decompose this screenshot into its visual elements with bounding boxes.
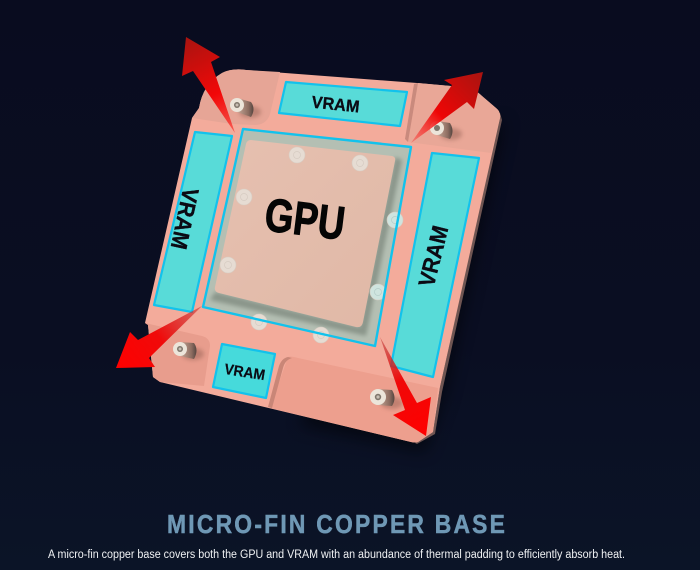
label: VRAM: [166, 186, 204, 252]
screws on frame: [220, 147, 403, 343]
description: A micro-fin copper base covers both the GPU and VRAM with an abundance of thermal padding to efficiently absorb heat.: [48, 549, 625, 561]
standoff: top left: [230, 98, 261, 118]
arrow: bottom right: [380, 337, 431, 436]
plate body: [145, 69, 500, 442]
right VRAM pad: [391, 153, 479, 377]
recess: bottom left corner: [145, 323, 210, 386]
top VRAM pad: [279, 82, 407, 126]
standoff: top right: [430, 121, 462, 140]
recess: top right corner: [408, 83, 500, 153]
label: VRAM: [413, 223, 453, 289]
frame outline: [203, 129, 411, 346]
GPU thermal frame: [203, 129, 411, 346]
plate side edge: [415, 113, 502, 444]
label: GPU: [262, 187, 348, 250]
standoff: bottom left: [173, 342, 204, 360]
recess: bottom right area: [270, 357, 438, 442]
arrow: top left: [182, 37, 235, 133]
label: VRAM: [223, 361, 266, 384]
frame inner shadow: [210, 157, 402, 336]
GPU die: [215, 140, 395, 327]
title: MICRO-FIN COPPER BASE: [167, 511, 505, 539]
standoff: bottom right: [370, 389, 403, 409]
plate shadow: [300, 120, 505, 452]
recess: top left corner: [192, 69, 280, 125]
arrow: top right: [411, 72, 483, 143]
left VRAM pad: [154, 132, 232, 312]
label: VRAM: [311, 93, 360, 116]
arrow: bottom left: [116, 306, 202, 368]
copper base plate: [145, 69, 505, 452]
small VRAM pad: [213, 344, 275, 398]
